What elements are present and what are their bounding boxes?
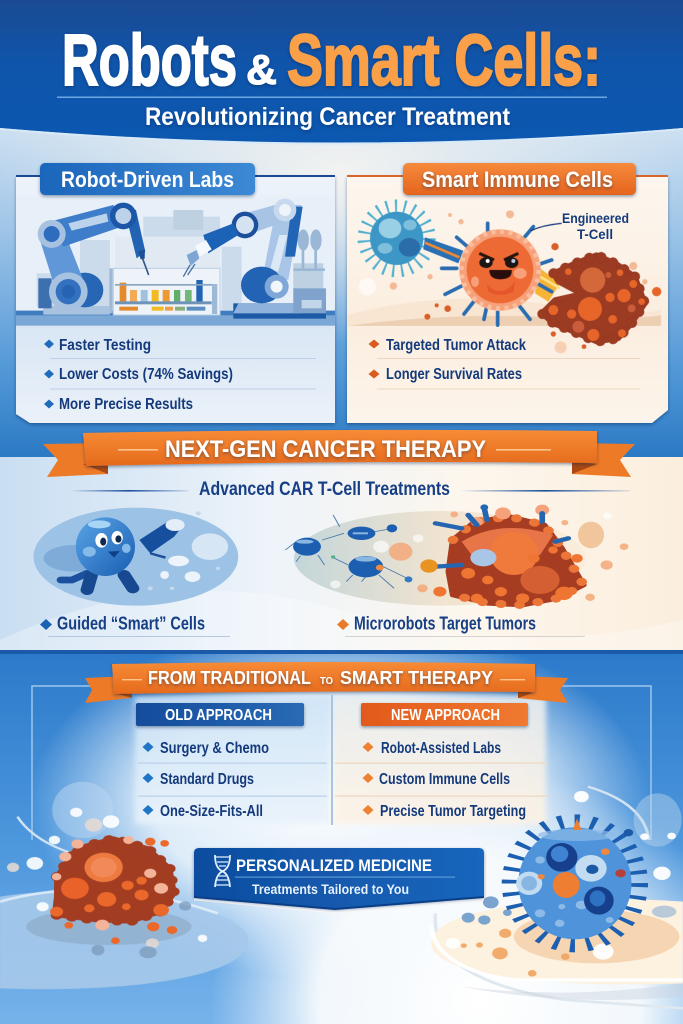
bullet list: smart cells — [368, 337, 640, 390]
title rule — [57, 96, 607, 98]
bullet list: robot labs: Faster Testing — [59, 337, 151, 354]
bullet list: smart cells: Longer Survival Rates — [386, 366, 522, 383]
bullet list: robot labs: More Precise Results — [59, 396, 193, 413]
header band — [0, 0, 683, 144]
background: section one — [0, 125, 683, 460]
test tube rack — [109, 268, 220, 315]
banner: from traditional to smart therapy: SMART THERAPY — [340, 668, 493, 688]
attack beams — [423, 237, 463, 263]
banner: from traditional to smart therapy: FROM TRADITIONAL — [148, 668, 311, 688]
banner: from traditional to smart therapy: TO — [320, 676, 333, 687]
icon: dna helix — [215, 855, 230, 887]
caption: microrobots target tumors: Microrobots Target Tumors — [354, 614, 536, 634]
title — [62, 21, 601, 101]
banner: next-gen cancer therapy — [43, 430, 635, 477]
illustration: guided smart cell — [34, 508, 238, 606]
right robot arm — [183, 199, 326, 319]
illustration: engineered t-cell attacking tumor — [347, 207, 661, 353]
column: old approach: OLD APPROACH — [165, 707, 272, 724]
subheading: advanced car t-cell treatments: Advanced CAR T-Cell Treatments — [199, 479, 450, 500]
callout: engineered t-cell: T-Cell — [577, 226, 613, 242]
microrobots — [285, 515, 412, 588]
panel: smart immune cells — [347, 163, 668, 423]
illustration: robot arms in lab — [16, 197, 335, 326]
bullet list: robot labs: Lower Costs (74% Savings) — [59, 366, 233, 383]
background: section two band — [0, 457, 683, 654]
column: new approach: Custom Immune Cells — [379, 771, 510, 788]
illustration: bottom left tumor on dish — [0, 782, 248, 989]
callout: engineered t-cell: Engineered — [562, 210, 629, 226]
left robot arm — [38, 203, 149, 315]
caption: guided smart cells: Guided “Smart” Cells — [57, 614, 205, 634]
background: section three — [0, 654, 683, 1024]
column: new approach: NEW APPROACH — [391, 707, 500, 724]
column: new approach — [331, 695, 548, 825]
column: old approach — [135, 697, 331, 824]
bullet list: robot labs — [44, 337, 316, 413]
illustration: microrobots attacking tumor — [285, 504, 628, 606]
column: old approach: One-Size-Fits-All — [160, 803, 263, 820]
heading: robot-driven labs — [40, 163, 255, 195]
banner: personalized medicine: PERSONALIZED MEDICINE — [236, 856, 432, 875]
tumor — [542, 255, 661, 342]
tumor — [420, 504, 584, 605]
title: Robots — [62, 21, 237, 101]
column: new approach: Robot-Assisted Labs — [381, 740, 501, 757]
callout: engineered t-cell — [562, 210, 629, 242]
blue immune cell — [365, 207, 428, 270]
banner: personalized medicine — [194, 848, 484, 912]
column: old approach: Standard Drugs — [160, 771, 254, 788]
heading: robot-driven labs: Robot-Driven Labs — [61, 167, 234, 192]
banner: personalized medicine: Treatments Tailored to You — [252, 881, 409, 897]
illustration: bottom right immune cell on dish — [431, 787, 683, 1008]
subtitle: Revolutionizing Cancer Treatment — [145, 103, 511, 131]
banner: next-gen cancer therapy: NEXT-GEN CANCER THERAPY — [165, 436, 486, 463]
comparison frame — [32, 686, 651, 840]
title: & — [246, 46, 277, 93]
column: new approach: Precise Tumor Targeting — [380, 803, 526, 820]
heading: smart immune cells: Smart Immune Cells — [422, 167, 613, 192]
column: old approach: Surgery & Chemo — [160, 740, 269, 757]
panel: robot-driven labs — [16, 163, 335, 423]
banner: from traditional to smart therapy — [85, 662, 568, 703]
comparison table — [135, 695, 548, 825]
bullet list: smart cells: Targeted Tumor Attack — [386, 337, 526, 354]
engineered t-cell — [442, 223, 552, 325]
